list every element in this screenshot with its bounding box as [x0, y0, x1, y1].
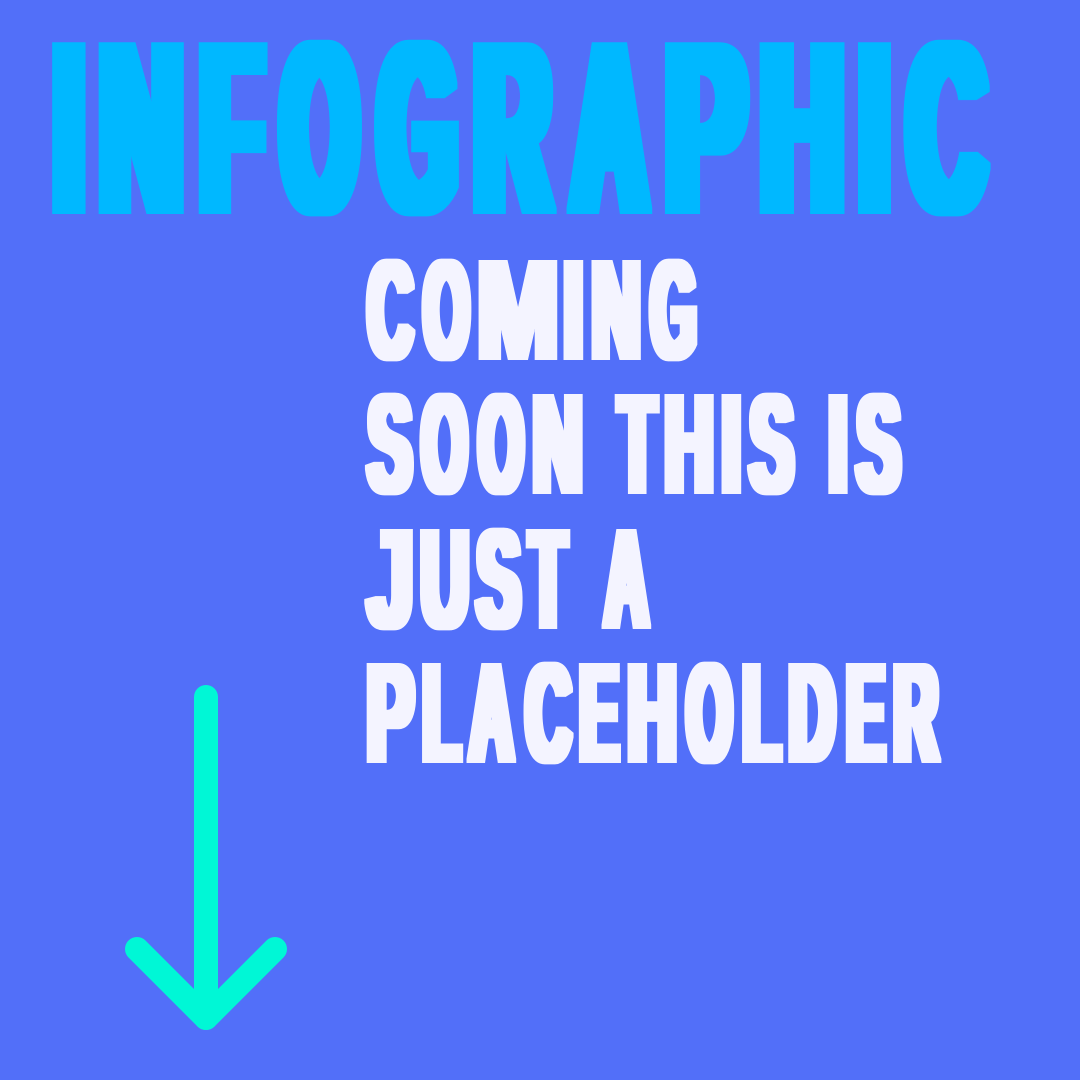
line: soon this is: O — [422, 366, 467, 522]
line: coming — [366, 232, 698, 388]
line: placeholder: E — [847, 635, 884, 791]
line: placeholder — [366, 635, 942, 791]
title: N — [100, 0, 183, 263]
line: placeholder: C — [526, 635, 570, 791]
line: placeholder: H — [628, 635, 676, 791]
line: just a: J — [368, 501, 414, 657]
line: soon this is — [364, 366, 903, 522]
title — [52, 0, 991, 263]
title: C — [908, 0, 984, 263]
line: soon this is: T — [619, 366, 655, 522]
line: just a: T — [530, 501, 566, 657]
title: A — [573, 0, 646, 263]
line: soon this is: N — [533, 366, 583, 522]
line: coming: O — [424, 232, 468, 388]
line: placeholder: L — [423, 635, 460, 791]
title: H — [761, 0, 844, 263]
line: just a — [364, 501, 652, 657]
icon: down arrow — [125, 685, 287, 1030]
line: just a: A — [605, 501, 648, 657]
line: placeholder: R — [894, 635, 938, 791]
line: just a: S — [477, 501, 521, 657]
line: placeholder: P — [367, 635, 413, 791]
line: soon this is: I — [829, 366, 847, 522]
line: coming: M — [477, 232, 558, 388]
title: R — [475, 0, 550, 263]
title: F — [201, 0, 263, 263]
line: coming: N — [592, 232, 640, 388]
line: placeholder: E — [580, 635, 618, 791]
line: placeholder: L — [743, 635, 780, 791]
title: I — [860, 0, 889, 263]
line: placeholder: D — [789, 635, 835, 791]
line: soon this is: H — [665, 366, 713, 522]
line: placeholder: A — [470, 635, 513, 791]
title: O — [282, 0, 357, 263]
line: soon this is: S — [750, 366, 793, 522]
line: soon this is: I — [722, 366, 741, 522]
line: placeholder: O — [687, 635, 731, 791]
line: soon this is: S — [857, 366, 900, 522]
title: G — [379, 0, 457, 263]
line: coming: G — [651, 232, 696, 388]
line: coming: C — [368, 232, 412, 388]
line: soon this is: O — [479, 366, 523, 522]
title: I — [54, 0, 84, 263]
line: soon this is: S — [368, 366, 411, 522]
line: coming: I — [564, 232, 583, 388]
line: just a: U — [421, 501, 468, 657]
title: P — [666, 0, 745, 263]
placeholder message — [364, 232, 942, 791]
